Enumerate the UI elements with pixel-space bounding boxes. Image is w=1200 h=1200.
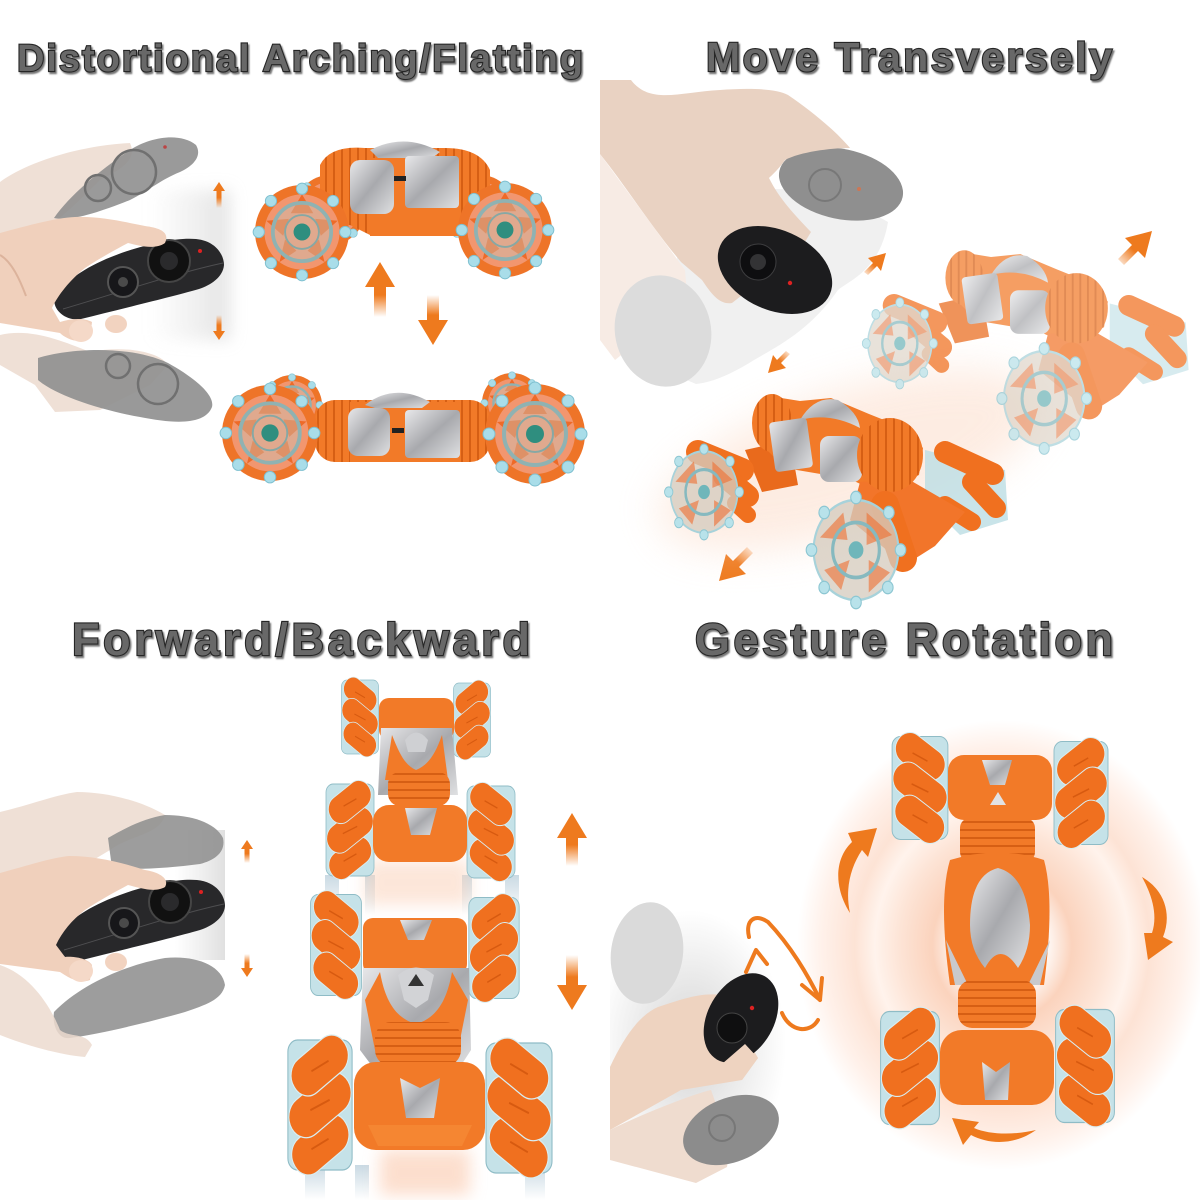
radial motion glow bbox=[797, 720, 1200, 1170]
arrow: large down bbox=[557, 955, 587, 1010]
car: arched bbox=[253, 141, 554, 281]
arrow: small up right bbox=[864, 253, 886, 275]
arrow: large up bbox=[557, 813, 587, 866]
motion trails bbox=[305, 860, 545, 1200]
hand and remote group bbox=[0, 792, 225, 1057]
heading: Move Transversely: Move Transversely bbox=[706, 34, 1112, 80]
car: rear ghost bbox=[862, 250, 1189, 454]
motion glow bbox=[638, 332, 1062, 588]
hand and remote group bbox=[604, 897, 802, 1183]
heading: Gesture Rotation: Gesture Rotation bbox=[695, 614, 1113, 665]
arrow: small down bbox=[213, 315, 225, 340]
car: front bbox=[665, 394, 1008, 609]
arrow: small down bbox=[241, 954, 253, 977]
car: rotation top view bbox=[875, 726, 1120, 1136]
panel: forward and backward bbox=[0, 614, 587, 1200]
arrow: small up bbox=[241, 840, 253, 863]
arrow: large up bbox=[365, 262, 395, 317]
panel: distortional arching and flatting bbox=[0, 38, 587, 486]
arrow: large down bbox=[418, 295, 448, 345]
hand and remote group bbox=[0, 137, 230, 422]
panel: gesture rotation bbox=[604, 614, 1200, 1183]
arrow: large down left bbox=[719, 547, 753, 581]
panel: move transversely bbox=[600, 34, 1189, 609]
car: flat bbox=[220, 372, 587, 486]
arrow: small circular gesture bbox=[746, 918, 822, 1029]
car: rear top view bbox=[322, 673, 519, 887]
hand and remote group bbox=[600, 80, 910, 396]
car: front top view bbox=[282, 885, 558, 1186]
arrow: small up bbox=[213, 182, 225, 208]
arrow: large up right bbox=[1118, 231, 1152, 265]
heading: Distortional Arching/Flatting: Distortional Arching/Flatting bbox=[17, 38, 583, 80]
heading: Forward/Backward: Forward/Backward bbox=[72, 614, 530, 665]
arrow: rotation bottom bbox=[952, 1118, 1036, 1145]
arrow: rotation upper left bbox=[838, 828, 877, 913]
arrow: small down left bbox=[768, 351, 790, 373]
arrow: rotation right bbox=[1142, 877, 1173, 960]
